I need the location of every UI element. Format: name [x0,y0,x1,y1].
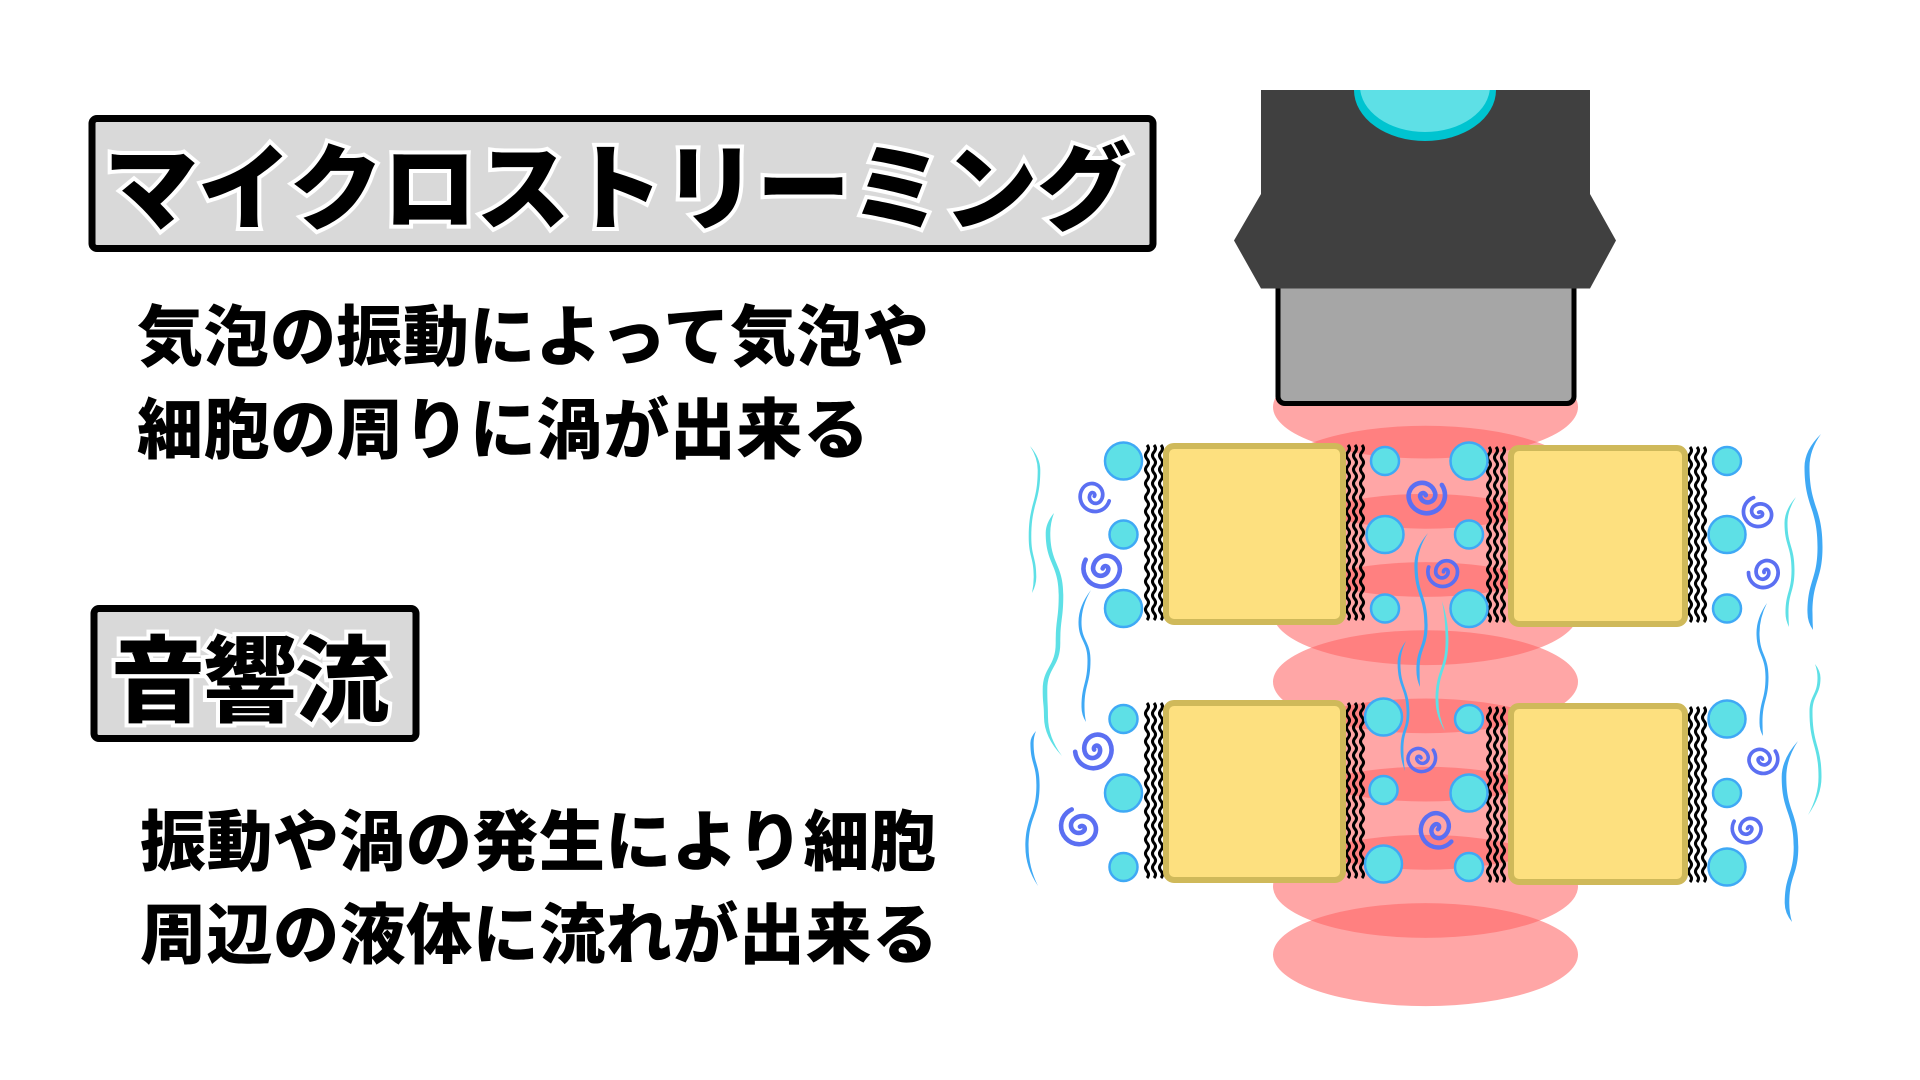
infographic canvas [88,90,1822,1006]
heading: acoustic streaming: 音響流 [111,629,389,734]
heading: acoustic streaming [94,608,416,738]
text block: microstreaming description [137,300,929,467]
ultrasound probe [1234,90,1616,406]
text block: microstreaming description: 気泡の振動によって気泡や [137,300,929,374]
text block: acoustic streaming description [140,805,938,972]
cells [1166,446,1685,882]
heading: microstreaming: マイクロストリーミング [104,137,1131,242]
vortex spirals [1054,477,1782,854]
bubbles [1105,442,1746,886]
wavy membrane lines [1146,445,1706,882]
text block: acoustic streaming description: 振動や渦の発生により細胞 [140,805,936,879]
fluid flow lines [1025,434,1822,922]
ultrasound beam ellipses [1273,356,1578,1006]
text block: microstreaming description: 細胞の周りに渦が出来る [137,393,869,467]
text block: acoustic streaming description: 周辺の液体に流れが出来る [140,898,938,972]
